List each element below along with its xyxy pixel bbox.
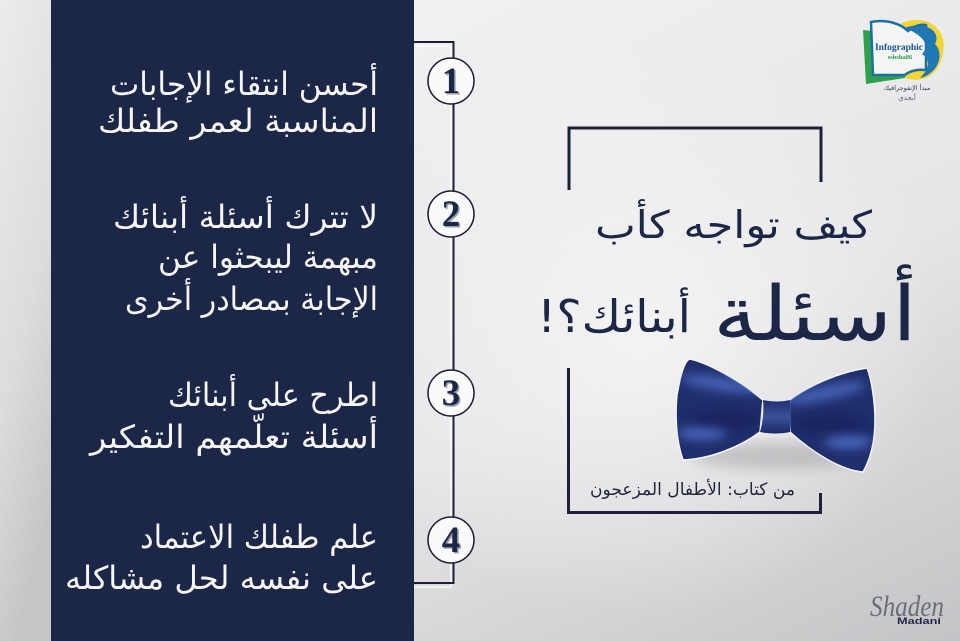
logo: ssbsha86 [888,54,913,61]
logo: أبجدي [898,93,916,102]
tip 3 text: اطرح على أبنائك [168,374,378,414]
step 1 number badge [428,58,474,104]
tip 2 text: الإجابة بمصادر أخرى [125,278,378,318]
step 4 number badge: 4 [442,520,460,561]
signature: Shaden [870,590,944,623]
title: أسئلة [713,264,917,358]
left background strip [0,0,51,641]
logo [863,20,944,102]
tip 2 text: لا تترك أسئلة أبنائك [113,196,378,236]
tip 1 text: المناسبة لعمر طفلك [98,102,378,140]
background glow [340,40,940,620]
tip 4 text: على نفسه لحل مشاكله [65,559,378,597]
tip 4 text: علم طفلك الاعتماد [140,518,378,556]
step 2 number badge: 2 [443,196,462,236]
step 2 number badge: 2 [442,194,460,235]
step 3 number badge: 3 [442,373,460,414]
step 3 number badge: 3 [443,374,462,416]
logo: Infographic [875,43,923,53]
title [537,199,917,358]
step 1 number badge: 1 [443,62,462,104]
panel: navy tips column [51,0,414,641]
tip 2 text [113,196,378,318]
tip 2 text: مبهمة ليبحثوا عن [158,238,378,276]
tip 1 text [98,63,378,140]
source note: من كتاب: الأطفال المزعجون [590,479,795,500]
step 4 number badge: 4 [443,522,462,562]
title frame bottom [568,368,820,512]
signature: Madani [897,616,941,626]
step 1 number badge: 1 [442,61,460,102]
tip 1 text: أحسن انتقاء الإجابات [110,63,378,103]
logo: مبدأ الإنفوجرافيك [884,83,930,92]
tip 4 text [65,518,378,597]
step 4 number badge [428,517,474,563]
tip 3 text [88,374,378,456]
step 2 number badge [428,191,474,237]
title: أبنائك؟! [537,287,691,343]
tip 3 text: أسئلة تعلّمهم التفكير [88,413,378,456]
icon: bow tie [676,359,875,472]
step 3 number badge [428,370,474,416]
connector line [414,42,454,587]
title frame top [569,128,821,190]
title: كيف تواجه كأب [595,199,873,248]
